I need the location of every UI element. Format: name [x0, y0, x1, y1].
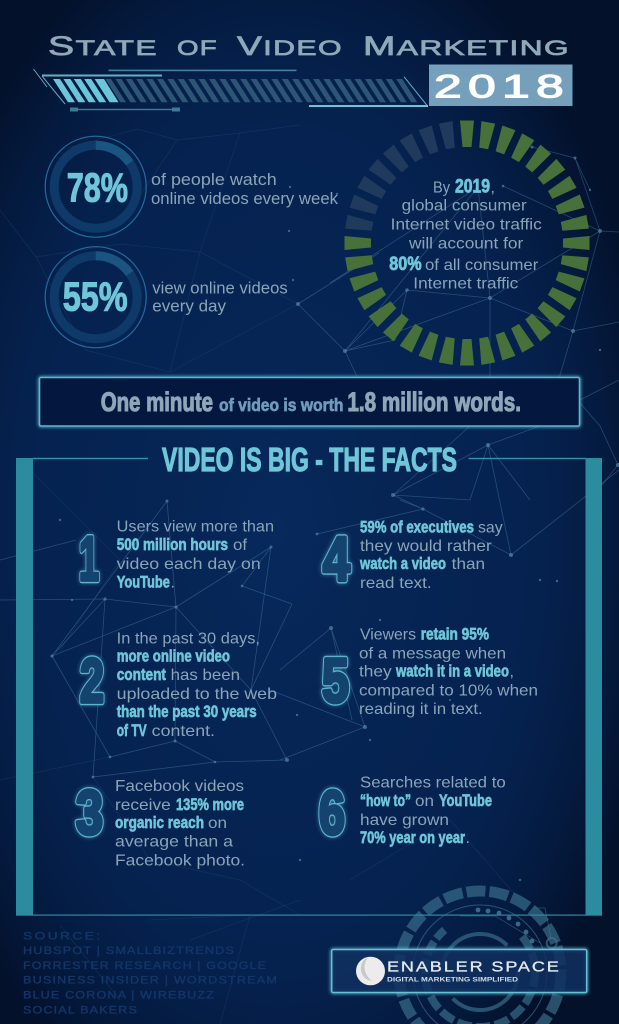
fact 5: retain 95%: [421, 625, 489, 643]
fact 4: read text.: [360, 575, 432, 592]
fact 4: 4: [323, 525, 350, 594]
fact 6: 6: [319, 779, 345, 848]
fact 1: 1: [79, 525, 99, 594]
fact 2: In the past 30 days,: [117, 630, 260, 647]
fact 2: more online video: [117, 648, 230, 666]
fact 5: watch it in a video: [395, 663, 509, 681]
ring chart: 80% of internet traffic: will account for: [408, 235, 524, 252]
fact 3: on: [208, 815, 227, 832]
ring chart: 80% of internet traffic: 2019: [455, 177, 490, 198]
year badge: 2018: [434, 68, 570, 104]
ring chart: 80% of internet traffic: global consumer: [402, 198, 527, 215]
fact 5: ,: [510, 664, 514, 681]
source list: BLUE CORONA | WIREBUZZ: [23, 990, 215, 1002]
fact 1: 1: [79, 525, 99, 594]
fact 2: [80, 630, 277, 740]
fact 6: [319, 775, 506, 848]
fact 3: [76, 778, 245, 870]
stat: 55% daily viewers: [45, 247, 288, 348]
banner: one minute of video: [40, 378, 580, 426]
fact 3: Facebook videos: [115, 778, 244, 795]
stat: 78% weekly viewers: of people watch: [151, 171, 277, 189]
fact 2: uploaded to the web: [117, 686, 277, 703]
title: S TATE: [48, 31, 158, 61]
fact 3: average than a: [115, 834, 233, 851]
title: V IDEO: [237, 31, 343, 61]
fact 4: watch a video: [359, 555, 446, 573]
ring chart: 80% of internet traffic: of all consumer: [425, 257, 539, 274]
fact 1: Users view more than: [117, 519, 274, 536]
fact 3: 135% more: [176, 796, 244, 814]
fact 3: receive: [115, 797, 171, 814]
fact 1: 500 million hours: [117, 536, 228, 554]
fact 5: reading it in text.: [359, 701, 483, 718]
fact 6: Searches related to: [360, 775, 506, 792]
logo: enabler space: [332, 950, 587, 992]
fact 5: of a message when: [359, 645, 506, 662]
title: OF: [177, 36, 218, 60]
fact 4: 4: [323, 525, 350, 594]
title: [48, 31, 570, 61]
fact 4: they would rather: [360, 538, 492, 555]
fact 1: [79, 519, 274, 594]
title: M ARKETING: [363, 31, 570, 61]
ring chart: 80% of internet traffic: [344, 120, 590, 366]
fact 2: 2: [80, 647, 104, 716]
fact 2: content.: [152, 723, 215, 740]
source list: HUBSPOT | SMALLBIZTRENDS: [23, 945, 235, 957]
fact 4: [323, 518, 503, 594]
fact 4: 59% of executives: [360, 518, 474, 536]
stat: 55% daily viewers: every day: [152, 298, 227, 316]
fact 3: organic reach: [115, 814, 204, 832]
fact 5: compared to 10% when: [359, 683, 538, 700]
fact 1: video each day on: [117, 556, 261, 573]
stat: 78% weekly viewers: [45, 136, 339, 237]
fact 1: YouTube: [117, 573, 170, 591]
ring chart: 80% of internet traffic: ,: [490, 180, 495, 197]
progress bar decoration: [34, 69, 428, 112]
fact 6: on: [415, 793, 434, 810]
stat: 55% daily viewers: 55%: [63, 274, 128, 320]
ring chart: 80% of internet traffic: By: [433, 180, 450, 197]
fact 6: .: [466, 830, 470, 847]
stat: 55% daily viewers: view online videos: [152, 280, 288, 298]
fact 5: 5: [322, 647, 349, 716]
network background: [0, 147, 619, 777]
fact 1: 1: [79, 525, 99, 594]
fact 3: 3: [76, 779, 103, 848]
logo: enabler space: ENABLER SPACE: [387, 960, 561, 976]
fact 6: have grown: [360, 812, 449, 829]
banner: one minute of video: One minute: [101, 387, 213, 417]
fact 2: has been: [171, 667, 240, 684]
source list: BUSINESS INSIDER | WORDSTREAM: [23, 975, 278, 987]
source list: SOCIAL BAKERS: [23, 1004, 138, 1016]
fact 5: [322, 625, 538, 718]
facts panel frame: [16, 458, 602, 916]
fact 4: than: [452, 556, 485, 573]
fact 6: 6: [319, 779, 345, 848]
year badge: [429, 64, 572, 106]
fact 2: 2: [80, 647, 104, 716]
fact 1: .: [170, 574, 175, 591]
banner: one minute of video: 1.8 million words.: [347, 387, 521, 417]
fact 1: of: [233, 537, 248, 554]
fact 4: say: [478, 519, 503, 536]
fact 6: 6: [319, 779, 345, 848]
ring chart: 80% of internet traffic: Internet traffic: [413, 276, 518, 293]
fact 2: of TV: [117, 722, 147, 740]
fact 3: 3: [76, 779, 103, 848]
stat: 78% weekly viewers: 78%: [67, 165, 128, 211]
fact 2: content: [117, 666, 166, 684]
source list: FORRESTER RESEARCH | GOOGLE: [23, 960, 267, 972]
banner: one minute of video: of video is worth: [219, 395, 344, 415]
hud circle graphic: [399, 891, 561, 1024]
fact 3: Facebook photo.: [115, 853, 245, 870]
source list: [23, 930, 278, 1016]
ring chart: 80% of internet traffic: Internet video traffic: [391, 216, 542, 233]
logo: enabler space: DIGITAL MARKETING SIMPLIFIED: [387, 976, 519, 983]
fact 6: “how to”: [360, 792, 411, 810]
fact 2: than the past 30 years: [117, 703, 257, 721]
fact 3: 3: [76, 779, 103, 848]
fact 2: 2: [80, 647, 104, 716]
source list: SOURCE:: [23, 930, 103, 942]
fact 6: 70% year on year: [360, 829, 465, 847]
fact 4: 4: [323, 525, 350, 594]
heading: video is big: VIDEO IS BIG - THE FACTS: [162, 442, 457, 479]
fact 5: they: [359, 664, 392, 681]
fact 5: 5: [322, 647, 349, 716]
fact 5: 5: [322, 647, 349, 716]
fact 6: YouTube: [439, 792, 492, 810]
ring chart: 80% of internet traffic: 80%: [389, 254, 422, 275]
stat: 78% weekly viewers: online videos every week: [151, 190, 339, 208]
fact 5: Viewers: [360, 626, 416, 643]
